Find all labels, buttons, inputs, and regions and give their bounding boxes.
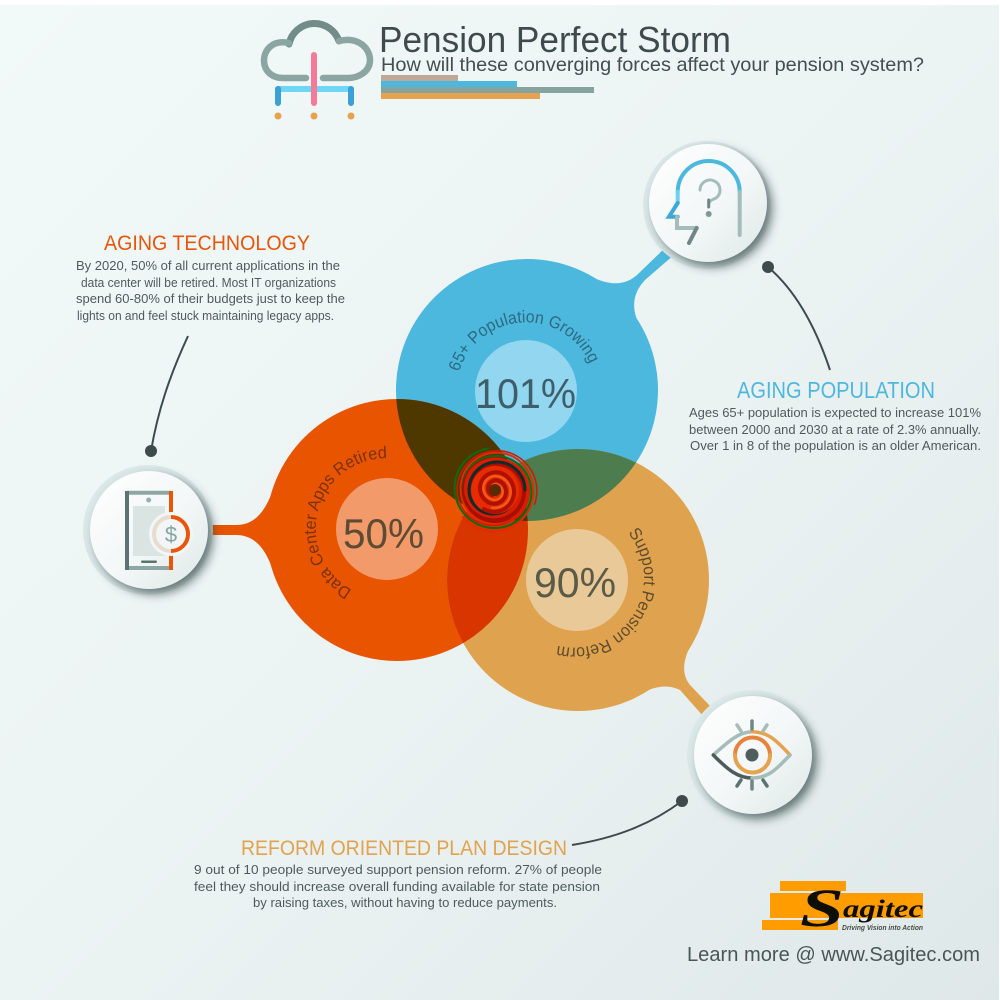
stat circle: 50% <box>336 478 438 580</box>
body: aging population: Ages 65+ population is expected to increase 101% <box>689 405 981 420</box>
overlap regions <box>396 399 636 643</box>
connector: reform plan design <box>572 795 688 845</box>
icon: eye <box>687 690 817 820</box>
stat circle: 90% <box>526 529 628 631</box>
body: aging technology: lights on and feel stuck maintaining legacy apps. <box>77 308 334 323</box>
logo: Sagitec: S <box>800 878 844 938</box>
body: reform oriented plan design: feel they should increase overall funding available for state pension <box>194 879 600 894</box>
curved label: 65+ population growing: 65+ Population Growing <box>449 310 598 370</box>
header colour bars <box>381 75 594 99</box>
stat circle: 90%: 90% <box>534 559 616 606</box>
body: aging population <box>689 405 981 453</box>
icon: phone with dollar coin: $ <box>165 522 177 547</box>
logo: Sagitec: agitec <box>843 896 923 923</box>
learn more link text: Learn more @ www.Sagitec.com <box>687 944 980 966</box>
title: Pension Perfect Storm <box>379 19 731 60</box>
logo: Sagitec <box>762 878 923 938</box>
callout: reform oriented plan design <box>194 837 602 910</box>
venn diagram <box>212 250 710 714</box>
body: reform oriented plan design: 9 out of 10 people surveyed support pension reform. 27% of people <box>194 862 602 877</box>
callout: aging technology <box>76 232 345 323</box>
body: reform oriented plan design: by raising taxes, without having to reduce payments. <box>253 895 557 910</box>
body: aging technology <box>76 258 345 323</box>
body: aging population: Over 1 in 8 of the population is an older American. <box>690 438 981 453</box>
body: aging technology: By 2020, 50% of all current applications in the <box>76 258 340 273</box>
curved label: support pension reform: Support Pension Reform <box>557 528 655 659</box>
bubble: 65+ population growing <box>396 246 675 521</box>
body: aging population: between 2000 and 2030 at a rate of 2.3% annually. <box>689 422 981 437</box>
stat circle: 50%: 50% <box>343 510 424 557</box>
heading: aging population: AGING POPULATION <box>737 377 935 403</box>
body: reform oriented plan design <box>194 862 602 910</box>
icon: phone with dollar coin <box>83 465 213 595</box>
storm swirl <box>440 438 550 548</box>
connector: aging technology <box>145 336 188 457</box>
icon: head with question mark <box>643 141 772 269</box>
heading: reform oriented plan design: REFORM ORIENTED PLAN DESIGN <box>241 837 567 860</box>
curved label: data center apps retired: Data Center Apps Retired <box>304 446 386 600</box>
heading: aging technology: AGING TECHNOLOGY <box>104 232 310 255</box>
body: aging technology: spend 60-80% of their budgets just to keep the <box>76 291 345 306</box>
logo: Sagitec: Driving Vision into Action <box>842 923 923 932</box>
bubble: support pension reform <box>447 449 712 716</box>
stat circle: 101%: 101% <box>475 370 576 417</box>
bubble: data center apps retired <box>205 399 528 661</box>
connector: aging population <box>762 261 830 370</box>
callout: aging population <box>689 377 981 453</box>
header icon: cloud with storm bars <box>264 23 370 119</box>
stat circle: 101% <box>475 340 577 442</box>
subtitle: How will these converging forces affect your pension system? <box>381 54 924 76</box>
body: aging technology: data center will be retired. Most IT organizations <box>81 275 336 290</box>
